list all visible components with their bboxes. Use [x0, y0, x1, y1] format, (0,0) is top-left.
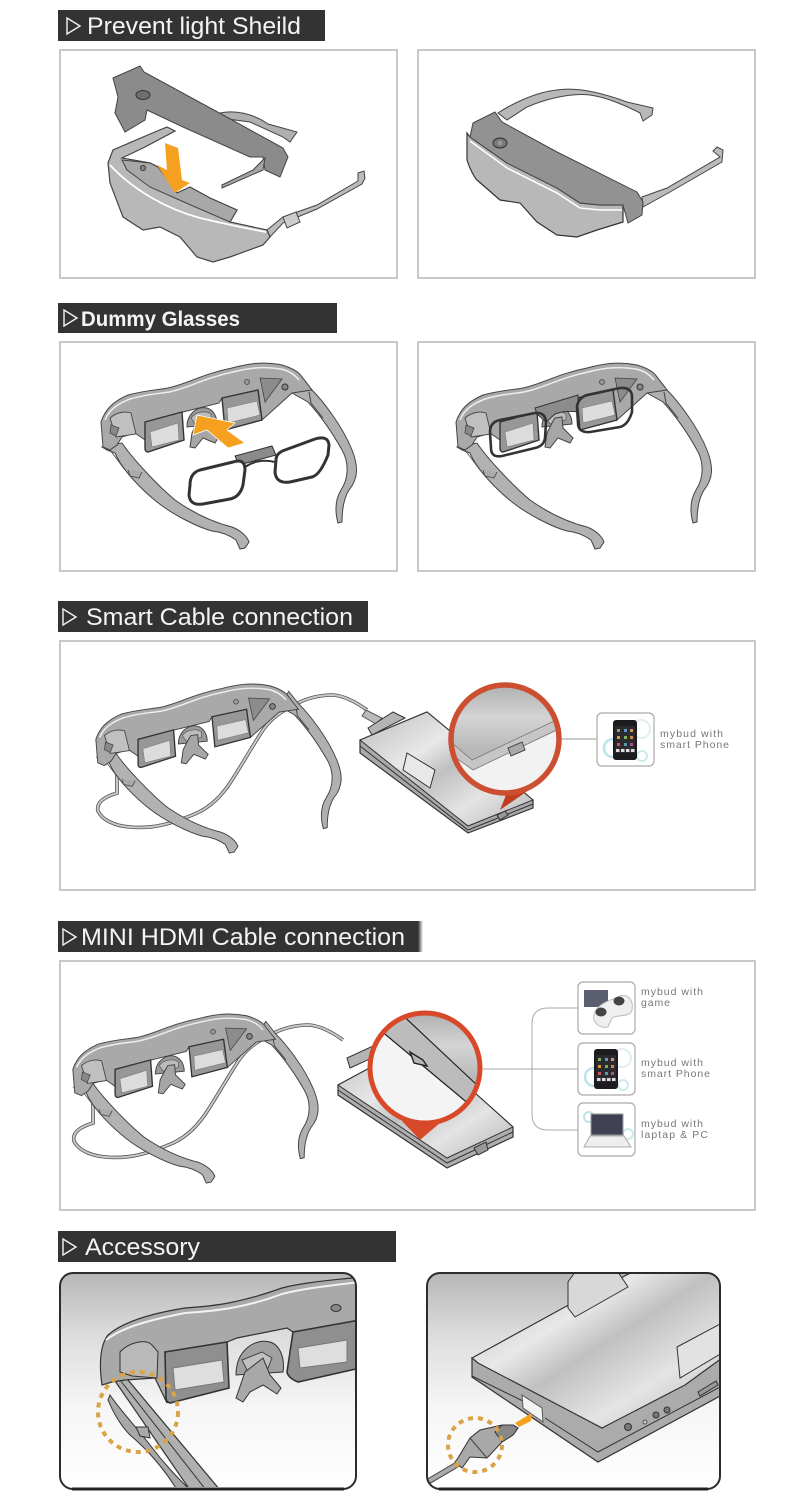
label: smart phone: mybud with — [641, 1057, 703, 1069]
cable — [98, 695, 367, 827]
cable and plug — [424, 1425, 518, 1484]
cable — [74, 1025, 343, 1157]
heading: Accessory: Accessory — [85, 1234, 200, 1261]
tile: laptop — [578, 1103, 635, 1156]
connector line — [562, 738, 597, 740]
panel: mini hdmi cable connection — [60, 961, 755, 1210]
dashed highlight circle — [448, 1418, 502, 1472]
tile: smart phone — [597, 713, 654, 766]
magnifier callout — [368, 1010, 482, 1140]
label: game: mybud with — [641, 986, 703, 998]
media device — [338, 1042, 513, 1168]
dummy frame — [189, 438, 329, 504]
magnifier callout — [445, 685, 565, 810]
panel: dummy glasses being fitted — [60, 342, 397, 571]
glasses with dummy frame — [456, 363, 712, 549]
label: smart phone: smart Phone — [660, 739, 729, 751]
panel: dummy glasses fitted — [418, 342, 755, 571]
glasses rear view — [73, 1014, 318, 1183]
near temple arm — [642, 147, 723, 207]
far temple arm — [220, 112, 297, 142]
tile: game — [578, 982, 635, 1034]
heading: Smart Cable connection: Smart Cable connection — [86, 604, 353, 631]
heading: Dummy Glasses — [58, 303, 337, 333]
glasses rear view — [101, 363, 357, 549]
icon: orange arrow — [193, 415, 245, 448]
panel: smart cable connection — [60, 641, 755, 890]
rear stand — [568, 1272, 628, 1317]
panel: accessory cable on glasses — [60, 1273, 360, 1490]
media device close-up — [472, 1268, 722, 1462]
panel: shield attached — [418, 50, 755, 278]
panel: shield being attached — [60, 50, 397, 278]
label: laptop and pc: mybud with — [641, 1118, 703, 1130]
label: smart phone: mybud with — [660, 728, 723, 740]
light shield piece — [113, 66, 288, 188]
label: game: game — [641, 997, 670, 1009]
shield — [470, 112, 643, 223]
heading: Accessory — [58, 1231, 396, 1262]
far temple arm — [498, 89, 653, 121]
icon: orange arrow down — [157, 143, 190, 193]
label: laptop and pc: laptap & PC — [641, 1129, 708, 1141]
heading: Dummy Glasses: Dummy Glasses — [81, 308, 240, 331]
heading: MINI HDMI Cable connection: MINI HDMI Cable connection — [81, 924, 405, 951]
glasses frame — [108, 127, 365, 262]
heading: Prevent light Sheild: Prevent light Sheild — [87, 13, 301, 40]
icon: orange arrow — [515, 1413, 532, 1427]
temple bands — [108, 1378, 220, 1490]
panel: accessory cable on device — [424, 1268, 722, 1489]
dashed highlight circle — [98, 1372, 178, 1452]
tile: smart phone — [578, 1043, 635, 1095]
glasses rear view — [96, 684, 341, 853]
visor — [467, 133, 623, 237]
media device — [360, 710, 533, 833]
glasses front close-up — [100, 1277, 360, 1403]
heading: Prevent light Sheild — [58, 10, 325, 41]
label: smart phone: smart Phone — [641, 1068, 710, 1080]
connector bracket lines — [483, 1008, 578, 1130]
